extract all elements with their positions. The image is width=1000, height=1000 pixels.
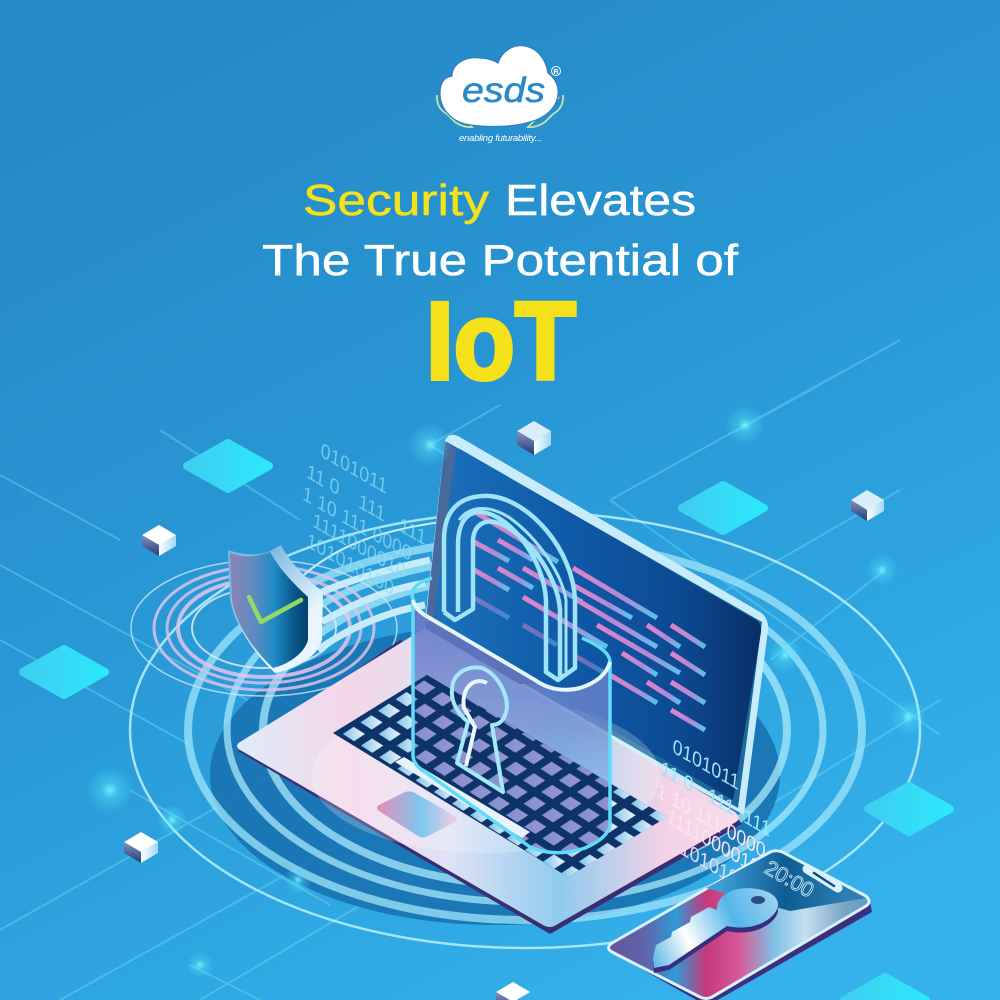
logo wordmark: esds: [462, 71, 545, 110]
ribbons from shield to lock: [296, 522, 440, 650]
phone upper panel: [706, 852, 866, 911]
binary text on screen and base: 11 0 111 111: [659, 757, 772, 842]
laptop screen: [424, 435, 768, 815]
pale light ellipse on base: [312, 699, 660, 853]
padlock: [412, 496, 610, 853]
binary text left: 11 0 111 111: [305, 460, 427, 551]
logo cloud: [440, 46, 558, 126]
lock body outline: [412, 578, 610, 853]
binary text on screen and base: 1 10 111 0000: [655, 779, 767, 863]
binary text on screen and base: 101010100: [659, 825, 749, 897]
logo tagline: enabling futurability...: [459, 133, 542, 144]
binary text left: 101010100: [305, 529, 395, 601]
dark left edge of screen: [425, 441, 456, 628]
binary text on screen and base: 0101011: [671, 735, 740, 795]
binary text left: 0101011: [319, 439, 388, 499]
binary text left: [303, 444, 425, 594]
binary text left: 1111000010: [311, 509, 407, 584]
binary text on screen and base: 1111000010: [665, 805, 761, 880]
floor shadow under laptop: [210, 625, 780, 925]
floating cubes: [124, 421, 884, 1000]
laptop: [237, 435, 772, 934]
icon: check mark: [249, 597, 301, 622]
title: [262, 183, 738, 382]
keyboard: [333, 675, 667, 877]
icon: shield: [228, 545, 323, 673]
phone: [608, 850, 872, 1000]
logo registered mark: R: [553, 69, 559, 76]
shield rings: [131, 560, 397, 696]
logo hands: [437, 95, 563, 127]
touchpad: [377, 791, 457, 838]
title: The True Potential of: [262, 236, 739, 285]
title: Security: [303, 176, 489, 225]
laptop base: [237, 628, 742, 934]
phone notch: [807, 869, 838, 888]
glow points: [86, 405, 926, 979]
large concentric rings: [130, 512, 920, 948]
keyhole: [452, 667, 507, 792]
logo: [437, 46, 563, 144]
code lines on screen: [474, 512, 705, 730]
lock top band: [413, 600, 610, 690]
shackle: [444, 496, 575, 680]
phone clock: 20:00: [761, 856, 818, 903]
title: IoT: [426, 280, 576, 403]
binary text on screen and base: [658, 740, 769, 878]
binary text left: 1 10 111 0000: [301, 482, 413, 566]
background circuit lines: [0, 340, 940, 1000]
diamond tiles: [23, 443, 950, 1000]
lock body glass: [414, 608, 608, 782]
title: Elevates: [505, 176, 696, 225]
icon: key: [653, 888, 778, 973]
spacebar: [395, 757, 530, 838]
